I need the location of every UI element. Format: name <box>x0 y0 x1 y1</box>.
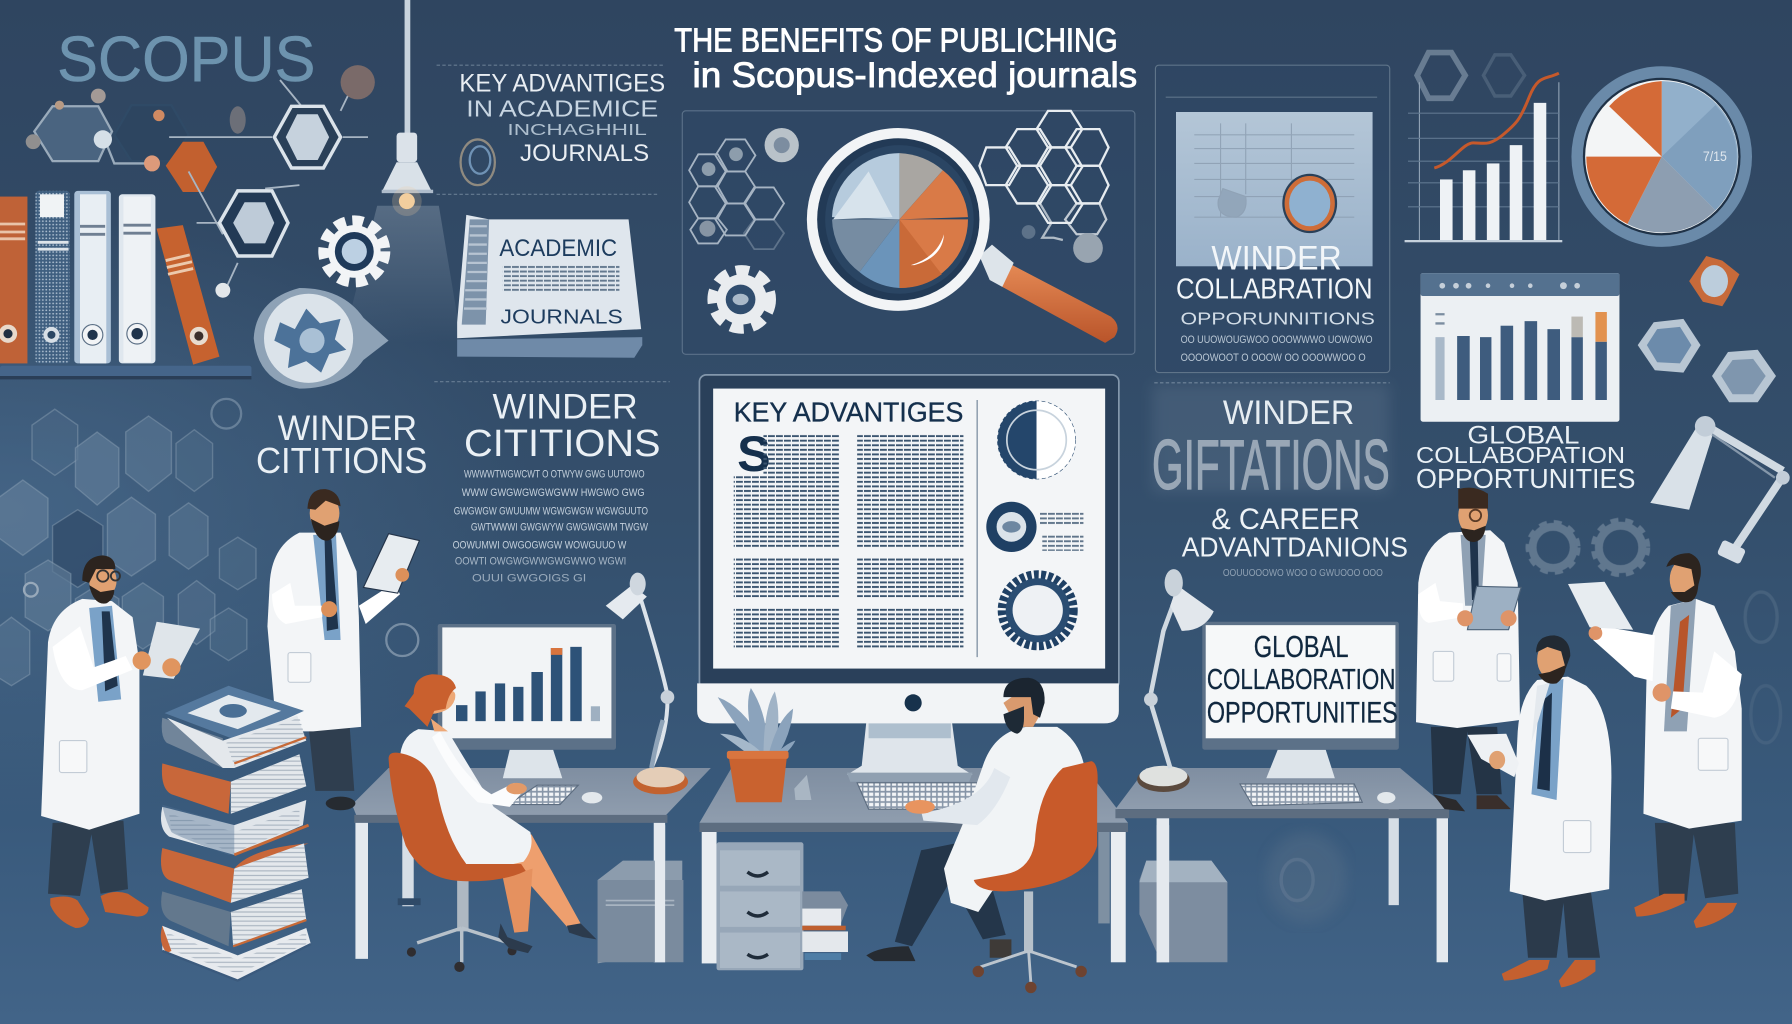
panel: collaboration card <box>1155 65 1390 373</box>
desk lamp right top <box>1650 416 1790 565</box>
binder light blue <box>74 191 111 363</box>
shoes <box>50 896 89 928</box>
head <box>1670 560 1697 599</box>
heading: key advantages in academic journals: INCHAGHHIL <box>507 122 647 139</box>
journal title: ACADEMIC <box>499 235 617 262</box>
coat <box>944 727 1086 912</box>
screen text: OPPORTUNITIES <box>1207 696 1398 729</box>
heading: key advantages in academic journals: KEY ADVANTIGES <box>459 69 665 97</box>
top tablet book <box>165 686 304 741</box>
paper <box>1467 734 1519 777</box>
centre desk <box>699 768 1128 963</box>
legs <box>503 834 581 928</box>
scientist behind book stack <box>267 489 419 810</box>
panel: ghost winder citations and career advantages: & CAREER <box>1211 503 1360 536</box>
title: THE BENEFITS OF PUBLICHING <box>674 22 1118 59</box>
heading: key advantages in academic journals: IN ACADEMICE <box>466 96 658 122</box>
scientist back right with tablet <box>1416 488 1521 811</box>
screen text: GLOBAL <box>1254 629 1349 664</box>
heading: key advantages in academic journals <box>437 65 665 194</box>
heading and body: winder citations centre: OUUI GWGOIGS GI <box>472 573 586 585</box>
trousers <box>1431 727 1502 794</box>
book 4 <box>161 843 309 903</box>
book 6 <box>161 926 311 981</box>
coat <box>41 599 139 830</box>
heading and body: winder citations centre: OOWTI OWGWGWWGWGWWO WGWI <box>455 556 626 568</box>
binder patterned <box>35 191 70 363</box>
heading and body: winder citations centre: WINDER <box>493 386 638 426</box>
heading and body: winder citations centre: GWTWWWI GWGWYW GWGWGWM TWGW <box>471 521 648 533</box>
paper <box>363 534 419 593</box>
panel: collaboration card: OOOOWOOT O OOOW OO OOOWWOO O <box>1181 352 1366 364</box>
right keyboard and mouse <box>1240 784 1395 806</box>
screen <box>713 389 1105 669</box>
pie chart dial <box>1571 66 1752 247</box>
head <box>89 563 117 598</box>
head <box>1003 689 1042 727</box>
binders on shelf <box>0 191 251 379</box>
screen gear middle <box>986 502 1037 552</box>
chair base <box>1024 891 1033 953</box>
screen heading: KEY ADVANTIGES <box>734 397 963 428</box>
gear icon <box>714 272 769 327</box>
right desk lamp <box>1137 569 1214 792</box>
title <box>674 22 1137 95</box>
book 5 <box>161 889 306 946</box>
heading and body: winder citations centre: OOWUMWI OWGOGWGW WOWGUUO W <box>453 540 626 552</box>
heading: global collaboration opportunities: GLOBAL <box>1467 421 1579 449</box>
panel: ghost winder citations and career advantages: ADVANTDANIONS <box>1182 532 1408 563</box>
heading and body: winder citations centre: WWWWTWGWCWT O OTWYW GWG UUTOWO <box>464 469 645 481</box>
article text columns <box>734 433 963 649</box>
chair <box>974 761 1098 891</box>
line and bar chart <box>1405 53 1562 242</box>
head <box>1537 640 1567 679</box>
heading: key advantages in academic journals: JOURNALS <box>520 140 649 167</box>
heading: global collaboration opportunities: OPPORTUNITIES <box>1416 463 1635 494</box>
panel: collaboration card: OPPORUNNITIONS <box>1181 309 1375 329</box>
gear icon left <box>326 223 383 280</box>
coat <box>1416 530 1520 728</box>
hexagon network icons <box>26 65 375 298</box>
left desk keyboard and mouse <box>509 785 602 805</box>
trousers <box>1522 891 1600 958</box>
ghost hex pattern left <box>0 399 418 686</box>
camera dot <box>905 694 922 711</box>
heading: winder citations left: WINDER <box>278 408 417 448</box>
scribble icon <box>461 139 495 185</box>
head <box>1458 496 1488 535</box>
scientist front right <box>1467 635 1611 987</box>
shelf <box>0 366 251 379</box>
trousers and shoes <box>895 843 1006 946</box>
book pile under desk <box>802 891 848 960</box>
journal subtitle: JOURNALS <box>501 305 623 328</box>
heading: winder citations left <box>256 408 427 481</box>
document sketch <box>1176 112 1373 266</box>
pie label: 7/15 <box>1703 149 1727 164</box>
right computer tower <box>1139 825 1227 962</box>
coat <box>267 533 361 731</box>
right honeycomb <box>979 111 1109 240</box>
right monitor <box>1202 622 1399 778</box>
heading and body: winder citations centre <box>434 382 670 585</box>
screen text <box>1207 629 1398 729</box>
bars on screen <box>456 647 582 721</box>
book 2 <box>162 754 306 814</box>
binder orange tilted <box>157 225 219 365</box>
trousers <box>48 821 128 896</box>
left honeycomb <box>689 139 784 249</box>
magnifier ring <box>807 128 990 311</box>
left computer tower <box>598 825 683 963</box>
heading and body: winder citations centre: WWW GWGWGWGWGWW HWGWO GWG <box>462 487 645 499</box>
card heading: WINDER <box>1211 240 1342 278</box>
coat <box>400 729 532 875</box>
stamp icon <box>765 128 799 162</box>
head <box>425 691 455 731</box>
chair <box>389 753 526 881</box>
small desk object <box>794 775 811 800</box>
trousers <box>309 727 354 791</box>
screen gear top <box>998 401 1075 479</box>
central monitor <box>697 375 1119 782</box>
badge icon teardrop <box>254 288 389 389</box>
pie inside lens <box>832 153 968 288</box>
panel: ghost winder citations and career advantages: GIFTATIONS <box>1152 426 1390 505</box>
tablet <box>1467 586 1521 630</box>
heading: winder citations left: CITITIONS <box>256 440 427 481</box>
coat <box>1510 677 1611 901</box>
woman at left desk <box>389 674 597 972</box>
scientist standing reading <box>41 555 200 928</box>
screen text: COLLABORATION <box>1207 664 1395 696</box>
left desk lamp <box>606 573 688 794</box>
heading and body: winder citations centre: CITITIONS <box>464 422 661 464</box>
paper <box>1568 582 1633 630</box>
heading and body: winder citations centre: GWGWGW GWUUMW WGWGWGW WGWGUUTO <box>454 505 648 517</box>
centre keyboard <box>857 783 983 809</box>
panel: magnifier and pie <box>682 111 1135 354</box>
book 1 <box>162 715 306 768</box>
panel: collaboration card: OO UUOWOUGWOO OOOWWWO UOWOWO <box>1181 334 1373 346</box>
title: in Scopus-Indexed journals <box>693 55 1137 95</box>
paper <box>143 622 200 679</box>
heading: global collaboration opportunities <box>1416 421 1635 494</box>
chair base <box>457 880 469 931</box>
academic journal stack <box>457 215 642 358</box>
panel: ghost winder citations and career advantages: OOUUOOOWO WOO O GWUOOO OOO <box>1223 568 1383 579</box>
magnifier handle <box>979 245 1118 343</box>
heading: global collaboration opportunities: COLLABOPATION <box>1416 442 1625 468</box>
drop cap: S <box>737 425 771 482</box>
panel: collaboration card: COLLABRATION <box>1176 273 1373 305</box>
screen gear bottom <box>1003 576 1072 645</box>
trousers <box>1655 823 1738 901</box>
plant <box>718 688 795 802</box>
scientist far right with paper <box>1568 553 1742 928</box>
left monitor <box>438 624 616 778</box>
filing cabinet <box>717 842 803 970</box>
binder orange <box>0 197 27 363</box>
ghost gears <box>1265 520 1781 923</box>
chart window <box>1421 273 1619 422</box>
coat <box>1643 599 1742 829</box>
left desk <box>352 768 711 962</box>
head <box>310 495 339 531</box>
binder white <box>119 194 155 363</box>
man at centre desk <box>866 678 1098 993</box>
panel: ghost winder citations and career advantages: WINDER <box>1223 394 1354 432</box>
right desk <box>1115 768 1449 962</box>
brand: SCOPUS: SCOPUS <box>57 23 315 95</box>
book 3 <box>161 800 309 855</box>
panel: ghost winder citations and career advantages <box>1152 383 1408 579</box>
small hexagon icons right <box>1638 256 1776 402</box>
hanging lamp with light cone <box>343 0 462 343</box>
stack of books <box>161 686 311 981</box>
